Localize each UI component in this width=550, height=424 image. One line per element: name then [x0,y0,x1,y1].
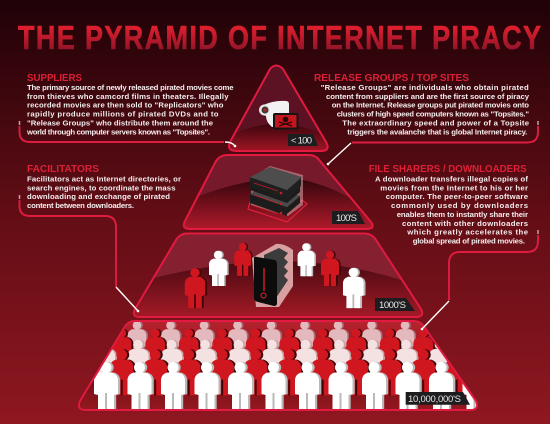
text block: release groups: The extraordinary speed and power of a Topsite [342,118,530,128]
text block: facilitators: downloading and exchange of pirated [27,192,170,201]
text block: suppliers: The primary source of newly released pirated movies come [27,83,234,92]
text block: release groups: "Release Groups" are individuals who obtain pirated [321,83,529,92]
heading: facilitators: FACILITATORS [27,163,99,175]
text block: release groups: on the Internet. Release groups put pirated movies onto [332,101,529,110]
row 3: pale figures [98,340,448,374]
text block: facilitators: search engines, to coordinate the mass [27,183,176,192]
text block: file sharers: A downloader transfers illegal copies of [375,174,528,184]
text block: release groups [321,83,530,136]
text block: file sharers: global spread of pirated movies. [413,236,525,246]
heading: suppliers: SUPPLIERS [27,72,82,84]
crowd of people [94,321,489,409]
text block: file sharers: computer. The peer-to-peer software [386,192,529,201]
leader: facilitators [20,195,139,312]
label: fewer than 100: < 100 [291,136,312,146]
row 2: red figures [110,349,471,395]
panel: release groups text [314,72,530,136]
leader: suppliers [20,121,236,147]
text block: facilitators: content between downloaders. [27,201,134,210]
label: 1000's: 1000'S [379,300,406,311]
row 4: red figures [112,328,435,360]
text block: file sharers: content with other downloaders [402,219,528,228]
icon: tower server [252,244,293,307]
panel: suppliers text [26,72,234,136]
icon: camcorder [259,101,289,127]
panel: facilitators text [27,163,181,210]
text block: suppliers: "Release Groups" who distribute them around the [27,118,214,128]
leader: file sharers [421,230,538,330]
heading: release groups: RELEASE GROUPS / TOP SITES [314,72,469,84]
row 5: pink figures [128,322,416,349]
label: 10,000,000's [406,392,470,405]
text block: file sharers: enables them to instantly share their [397,210,528,219]
text block: facilitators [27,174,181,210]
text block: suppliers: recorded movies are then sold to "Replicators" who [27,101,224,110]
label: 10,000,000's: 10,000,000'S [408,394,461,405]
tier 1: suppliers [228,64,329,152]
text block: file sharers: which greatly accelerates the [406,228,529,237]
tier 3: facilitators [130,234,430,320]
text block: release groups: content from suppliers and are the first source of piracy [326,92,530,101]
row 1: white figures [94,362,489,409]
text block: release groups: triggers the avalanche that is global Internet piracy. [347,127,527,136]
label: 100's [332,211,365,224]
text block: suppliers: from thieves who camcord films in theaters. Illegally [27,92,229,101]
leader: release groups [327,121,538,165]
text block: suppliers: rapidly produce millions of pirated DVDs and to [27,110,219,119]
text block: facilitators: Facilitators act as Internet directories, or [27,174,181,184]
text block: file sharers: commonly used by downloaders [391,201,528,210]
text block: file sharers: movies from the Internet to his or her [380,183,528,192]
heading: file sharers: FILE SHARERS / DOWNLOADERS [369,163,527,175]
icon: server stack [248,166,307,222]
text block: suppliers: world through computer servers known as "Topsites". [26,127,210,136]
panel: file sharers text [369,163,529,246]
title: THE PYRAMID OF INTERNET PIRACY [18,19,541,57]
tier 2: release groups [180,155,380,232]
label: 1000's [375,298,415,311]
people around tower [185,243,366,308]
text block: release groups: clusters of high speed computers known as "Topsites." [337,110,529,119]
icon: skull screen [273,113,298,130]
tier 4: file sharers crowd [79,321,489,410]
label: 100's: 100'S [336,213,357,224]
text block: suppliers [26,83,234,136]
text block: file sharers [375,174,529,246]
